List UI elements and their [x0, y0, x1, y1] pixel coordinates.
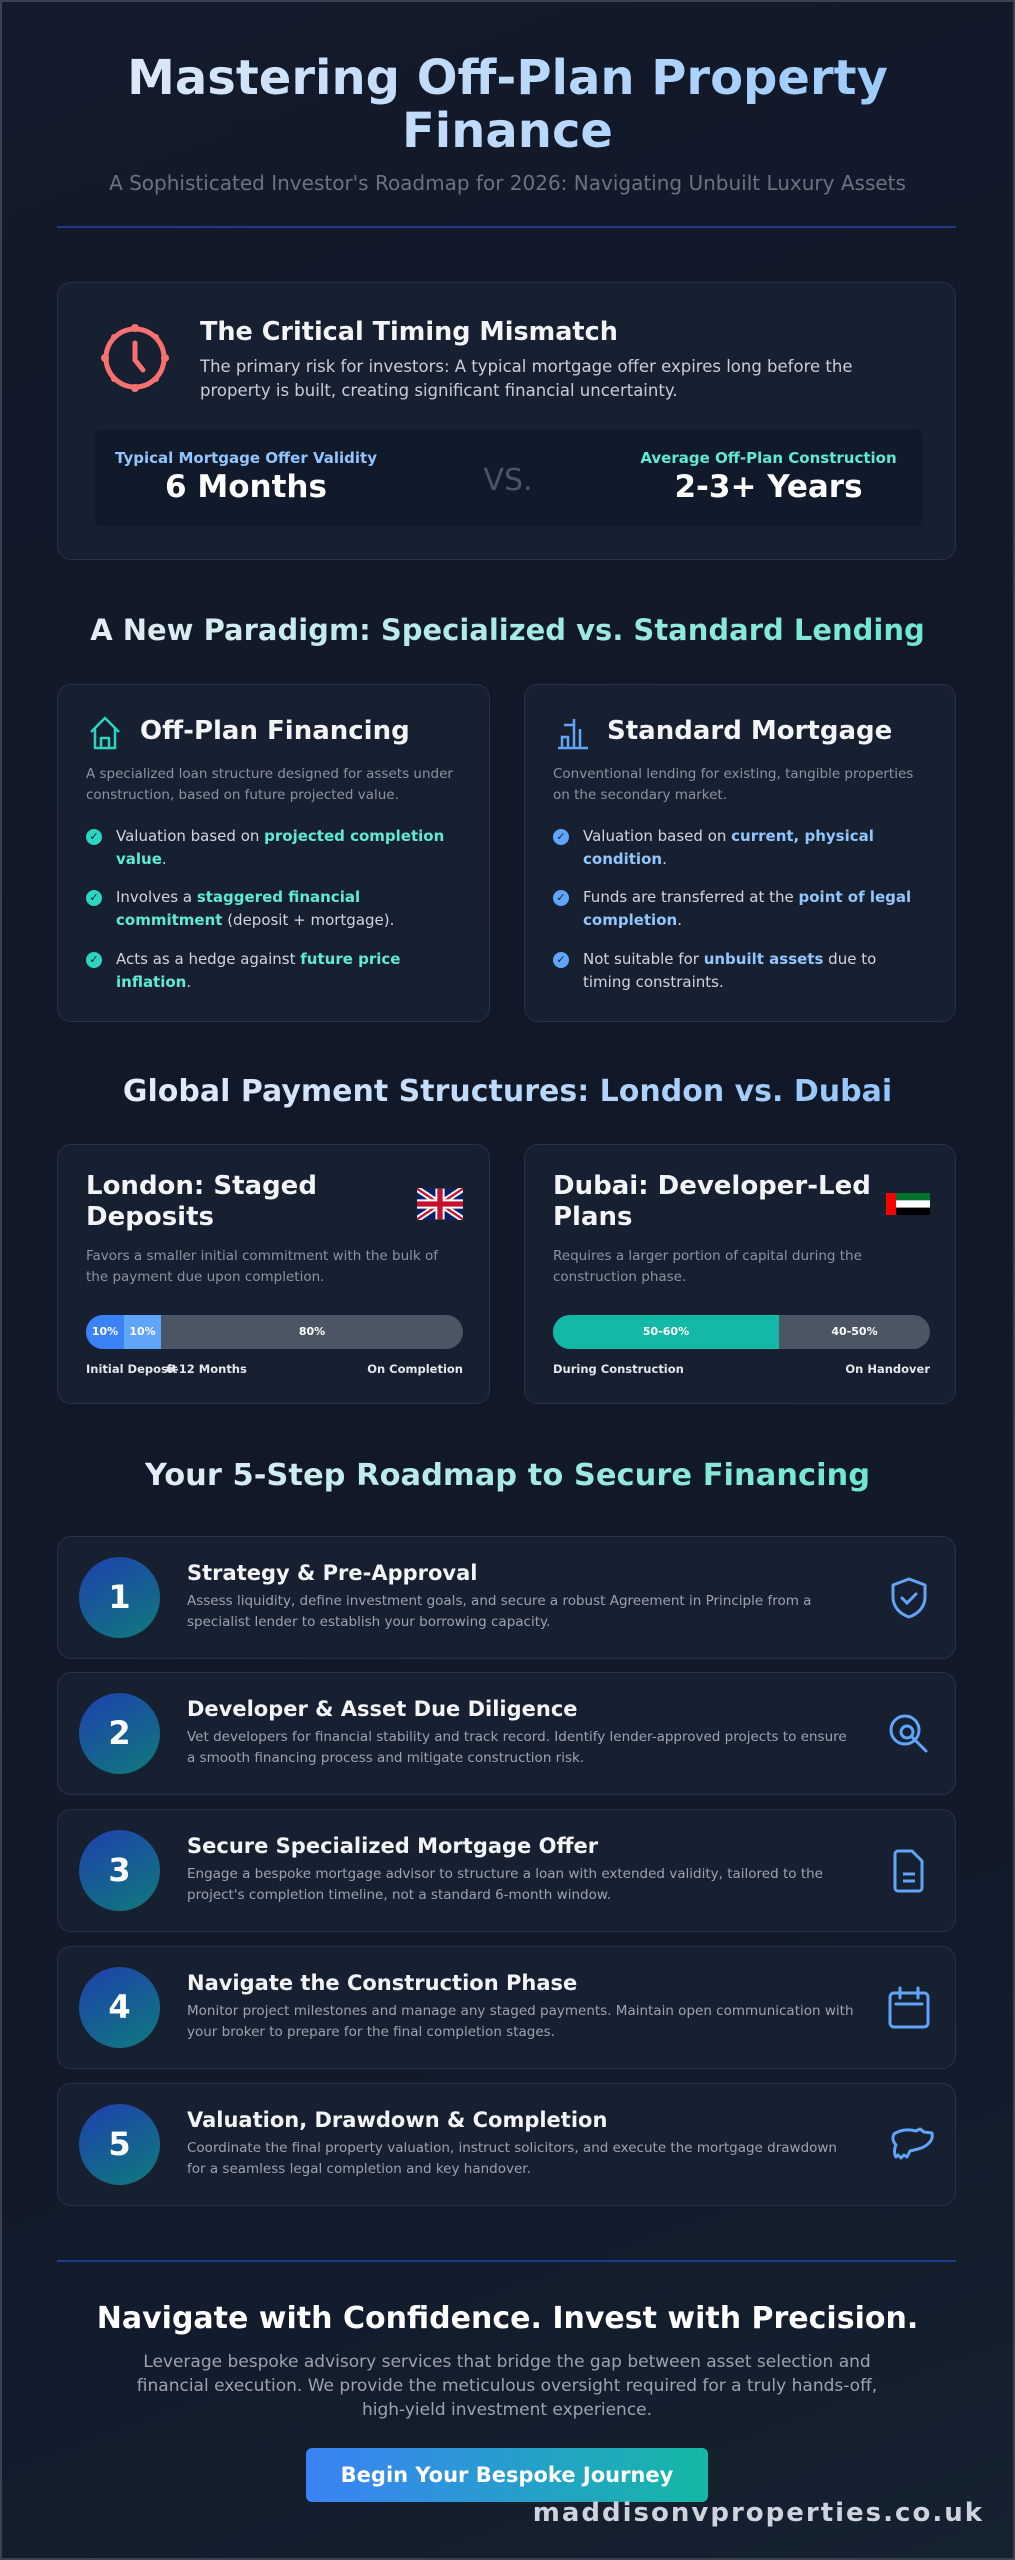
card title: Standard Mortgage	[607, 716, 892, 746]
CTA text: Leverage bespoke advisory services that bridge the gap between asset selection and financial execution. We provide the meticulous oversight required for a truly hands-off, high-yield investment experience.	[137, 2352, 877, 2420]
bar chart: london: 10%	[92, 1325, 118, 1338]
card title	[86, 1171, 317, 1232]
card description: Conventional lending for existing, tangible properties on the secondary market.	[553, 766, 913, 803]
step 4	[57, 1946, 956, 2069]
panel: standard mortgage: ✓	[556, 830, 566, 843]
card title: London: Staged	[86, 1171, 317, 1201]
panel: timing mismatch	[57, 282, 956, 560]
panel: standard mortgage: ✓	[556, 953, 566, 966]
card description: A specialized loan structure designed for assets under construction, based on future projected value.	[86, 766, 453, 803]
step 4: Navigate the Construction Phase	[187, 1971, 577, 1995]
heading: new paradigm: A New Paradigm: Specialized vs. Standard Lending	[90, 613, 925, 647]
CTA heading: Navigate with Confidence. Invest with Precision.	[97, 2301, 918, 2336]
panel: off-plan financing: ✓	[89, 891, 99, 904]
bar labels: During Construction	[553, 1362, 684, 1376]
icon: document	[894, 1850, 924, 1892]
panel: off-plan financing	[57, 684, 490, 1022]
step 1: 1	[108, 1578, 131, 1616]
icon: calendar	[888, 1986, 930, 2028]
CTA button	[306, 2448, 708, 2502]
bar labels	[553, 1362, 930, 1376]
card title	[553, 1171, 871, 1232]
card title: Dubai: Developer-Led	[553, 1171, 871, 1201]
comparison box: VS.	[483, 463, 533, 498]
bar chart: london: 80%	[299, 1325, 325, 1338]
bullets: Acts as a hedge against future price inflation.	[116, 950, 400, 991]
description: Requires a larger portion of capital during the construction phase.	[553, 1248, 862, 1285]
title: Mastering Off-Plan Property	[127, 50, 888, 106]
icon: handshake	[891, 2128, 934, 2160]
description: Favors a smaller initial commitment with the bulk of the payment due upon completion.	[86, 1248, 438, 1285]
bar chart: london	[86, 1315, 463, 1349]
bullets: Valuation based on current, physical condition.	[583, 827, 874, 868]
step 5: Coordinate the final property valuation, instruct solicitors, and execute the mortgage drawdown for a seamless legal completion and key handover.	[187, 2140, 837, 2177]
step 1: Assess liquidity, define investment goals, and secure a robust Agreement in Principle from a specialist lender to establish your borrowing capacity.	[187, 1593, 811, 1630]
panel: off-plan financing: ✓	[89, 830, 99, 843]
step 1: Strategy & Pre-Approval	[187, 1561, 478, 1585]
subtitle: A Sophisticated Investor's Roadmap for 2026: Navigating Unbuilt Luxury Assets	[109, 171, 906, 195]
step 4: 4	[108, 1988, 131, 2026]
step 2	[57, 1672, 956, 1795]
panel: standard mortgage: ✓	[556, 891, 566, 904]
description: The primary risk for investors: A typical mortgage offer expires long before the property is built, creating significant financial uncertainty.	[200, 357, 852, 400]
heading: The Critical Timing Mismatch	[200, 317, 618, 347]
bullets	[86, 827, 444, 991]
step 3	[57, 1809, 956, 1932]
panel: off-plan financing: ✓	[89, 953, 99, 966]
step 3: Engage a bespoke mortgage advisor to structure a loan with extended validity, tailored to the project's completion timeline, not a standard 6-month window.	[187, 1866, 823, 1903]
icon: uk flag	[417, 1188, 463, 1220]
step 2: Vet developers for financial stability and track record. Identify lender-approved projects to ensure a smooth financing process and mitigate construction risk.	[187, 1729, 847, 1766]
bullets	[553, 827, 911, 991]
bar labels: On Handover	[845, 1362, 930, 1376]
comparison box: 6 Months	[165, 469, 327, 505]
icon: uae flag	[886, 1193, 930, 1215]
bar chart: dubai: 50-60%	[643, 1325, 689, 1338]
step 3: Secure Specialized Mortgage Offer	[187, 1834, 598, 1858]
step 1	[57, 1536, 956, 1659]
heading: roadmap: Your 5-Step Roadmap to Secure Financing	[145, 1458, 870, 1493]
comparison box	[94, 429, 923, 526]
panel: london	[57, 1144, 490, 1404]
comparison box: Typical Mortgage Offer Validity	[115, 449, 377, 467]
CTA button: Begin Your Bespoke Journey	[341, 2463, 673, 2487]
step 5: Valuation, Drawdown & Completion	[187, 2108, 607, 2132]
bar labels	[86, 1362, 463, 1376]
step 5: 5	[108, 2125, 131, 2163]
bar chart: london: 10%	[129, 1325, 156, 1338]
icon: building	[558, 719, 588, 750]
bar labels: 6-12 Months	[166, 1362, 247, 1376]
comparison box: 2-3+ Years	[674, 469, 863, 505]
icon: clock	[101, 324, 169, 392]
bar labels: On Completion	[367, 1362, 463, 1376]
panel: dubai	[524, 1144, 956, 1404]
step 5	[57, 2083, 956, 2206]
bullets: Not suitable for unbuilt assets due to timing constraints.	[583, 950, 876, 991]
card title: Off-Plan Financing	[140, 716, 410, 746]
icon: shield	[892, 1578, 926, 1618]
step 2: Developer & Asset Due Diligence	[187, 1697, 578, 1721]
comparison box: Average Off-Plan Construction	[640, 449, 897, 467]
watermark: maddisonvproperties.co.uk	[533, 2498, 984, 2528]
title: Finance	[402, 103, 613, 159]
step 2: 2	[108, 1714, 131, 1752]
bullets: Involves a staggered financial commitment (deposit + mortgage).	[116, 888, 394, 929]
card title: Plans	[553, 1202, 632, 1232]
card title: Deposits	[86, 1202, 214, 1232]
bullets: Funds are transferred at the point of legal completion.	[583, 888, 911, 929]
step 4: Monitor project milestones and manage any staged payments. Maintain open communication with your broker to prepare for the final completion stages.	[187, 2003, 854, 2040]
title	[0, 52, 1015, 158]
panel: standard mortgage	[524, 684, 956, 1022]
bullets: Valuation based on projected completion value.	[116, 827, 444, 868]
heading: global payment structures: Global Payment Structures: London vs. Dubai	[123, 1074, 892, 1109]
step 3: 3	[108, 1851, 131, 1889]
bar chart: dubai: 40-50%	[831, 1325, 878, 1338]
icon: house	[90, 716, 120, 750]
icon: search	[890, 1714, 928, 1753]
bar chart: dubai	[553, 1315, 930, 1349]
bar labels: Initial Deposit	[86, 1362, 177, 1376]
